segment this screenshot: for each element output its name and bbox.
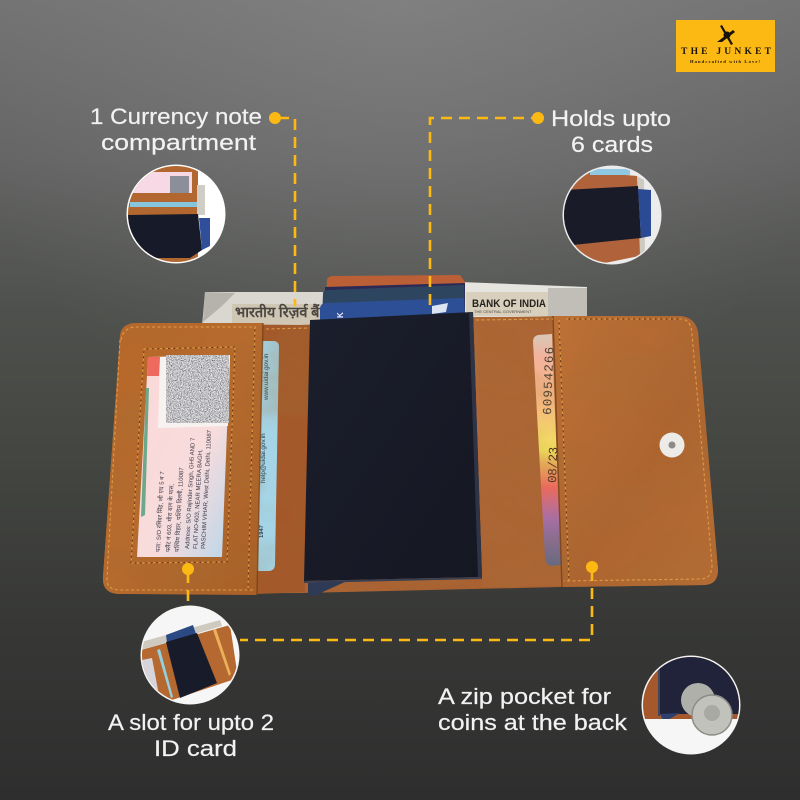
text: holds upto 6 cards xyxy=(551,106,671,157)
wallet body: 08/23 xyxy=(546,447,561,483)
flap shadow edges xyxy=(257,316,562,595)
text: slot for ID card: ID card xyxy=(154,736,237,761)
line: zip pocket xyxy=(240,570,592,640)
ID address text xyxy=(154,429,213,552)
icon: ID slot photo xyxy=(140,606,240,704)
ID address text: FLAT NO-603, NEAR MEERA BAGH, xyxy=(193,449,204,549)
ID address text: Address: S/O Rajinder Singh, GH5 AND 7 xyxy=(185,437,197,549)
callout: connector lines xyxy=(188,118,592,640)
text: currency note compartment: compartment xyxy=(101,130,256,155)
ID card strip text: www.uidai.gov.in xyxy=(263,353,270,401)
text: slot for ID card: A slot for upto 2 xyxy=(108,710,274,735)
icon: airplane xyxy=(717,25,735,45)
text: zip pocket for coins: coins at the back xyxy=(438,710,628,735)
ID card behind slot xyxy=(254,341,279,571)
ID address text: पश्चिम विहार, पश्चिम दिल्ली, 110087 xyxy=(173,467,185,552)
logo tagline: Handcrafted with Love! xyxy=(690,59,760,64)
snap button xyxy=(660,432,684,458)
ID green band xyxy=(141,388,149,517)
logo wordmark: THE JUNKET xyxy=(681,47,772,57)
wallet body: 1947 xyxy=(259,525,265,538)
text: currency note compartment: 1 Currency note xyxy=(90,104,262,129)
panel: right flap xyxy=(553,316,718,587)
text: slot for ID card xyxy=(108,710,274,761)
line: ID slot xyxy=(187,572,189,606)
cards in the card case xyxy=(320,275,465,322)
leather base xyxy=(103,316,718,594)
panel: left flap xyxy=(103,323,263,595)
card case ejector xyxy=(308,581,347,596)
stitching xyxy=(107,319,712,590)
logo: The Junket xyxy=(676,20,775,72)
line: holds cards xyxy=(430,118,537,305)
text: zip pocket for coins xyxy=(438,684,628,735)
banknote behind the wallet: THE CENTRAL GOVERNMENT xyxy=(474,309,532,314)
banknote behind the wallet xyxy=(202,282,587,330)
leather mottling xyxy=(258,341,560,571)
credit card strip xyxy=(533,334,561,566)
text: currency note compartment xyxy=(90,104,262,155)
ID card seal xyxy=(147,357,160,376)
icon: cards photo xyxy=(562,166,662,264)
panel: inner left leather xyxy=(256,325,312,594)
ID address text: फ्लैट नं 603, मीरा बाग के पास, xyxy=(164,483,176,552)
icon: coins photo xyxy=(642,655,742,759)
wallet body xyxy=(100,310,720,600)
ID address text: पता: S/O रमिंदर सिंह, जी एच 5 व 7 xyxy=(154,471,166,552)
text: holds upto 6 cards: 6 cards xyxy=(571,132,653,157)
icon: currency compartment photo xyxy=(126,164,226,264)
credit card number: 60954266 xyxy=(541,347,557,415)
black card case xyxy=(304,312,482,596)
banknote behind the wallet: भारतीय रिज़र्व बैं xyxy=(235,303,320,321)
callout dots xyxy=(182,112,598,575)
QR speckle xyxy=(166,355,229,423)
wallet body: help@uidai.gov.in xyxy=(260,433,267,483)
text: holds upto 6 cards: Holds upto xyxy=(551,106,671,131)
dark stitch holes xyxy=(131,319,682,590)
line: currency note xyxy=(278,118,295,306)
panel: inner right leather xyxy=(478,316,565,587)
text: zip pocket for coins: A zip pocket for xyxy=(438,684,611,709)
cards in the card case: K xyxy=(336,312,345,318)
banknote behind the wallet: BANK OF INDIA xyxy=(472,298,546,310)
ID address text: PASCHIM VIHAR, West Delhi, Delhi, 110087 xyxy=(201,429,213,549)
ID window xyxy=(137,355,230,557)
ID photo white area xyxy=(158,355,230,428)
